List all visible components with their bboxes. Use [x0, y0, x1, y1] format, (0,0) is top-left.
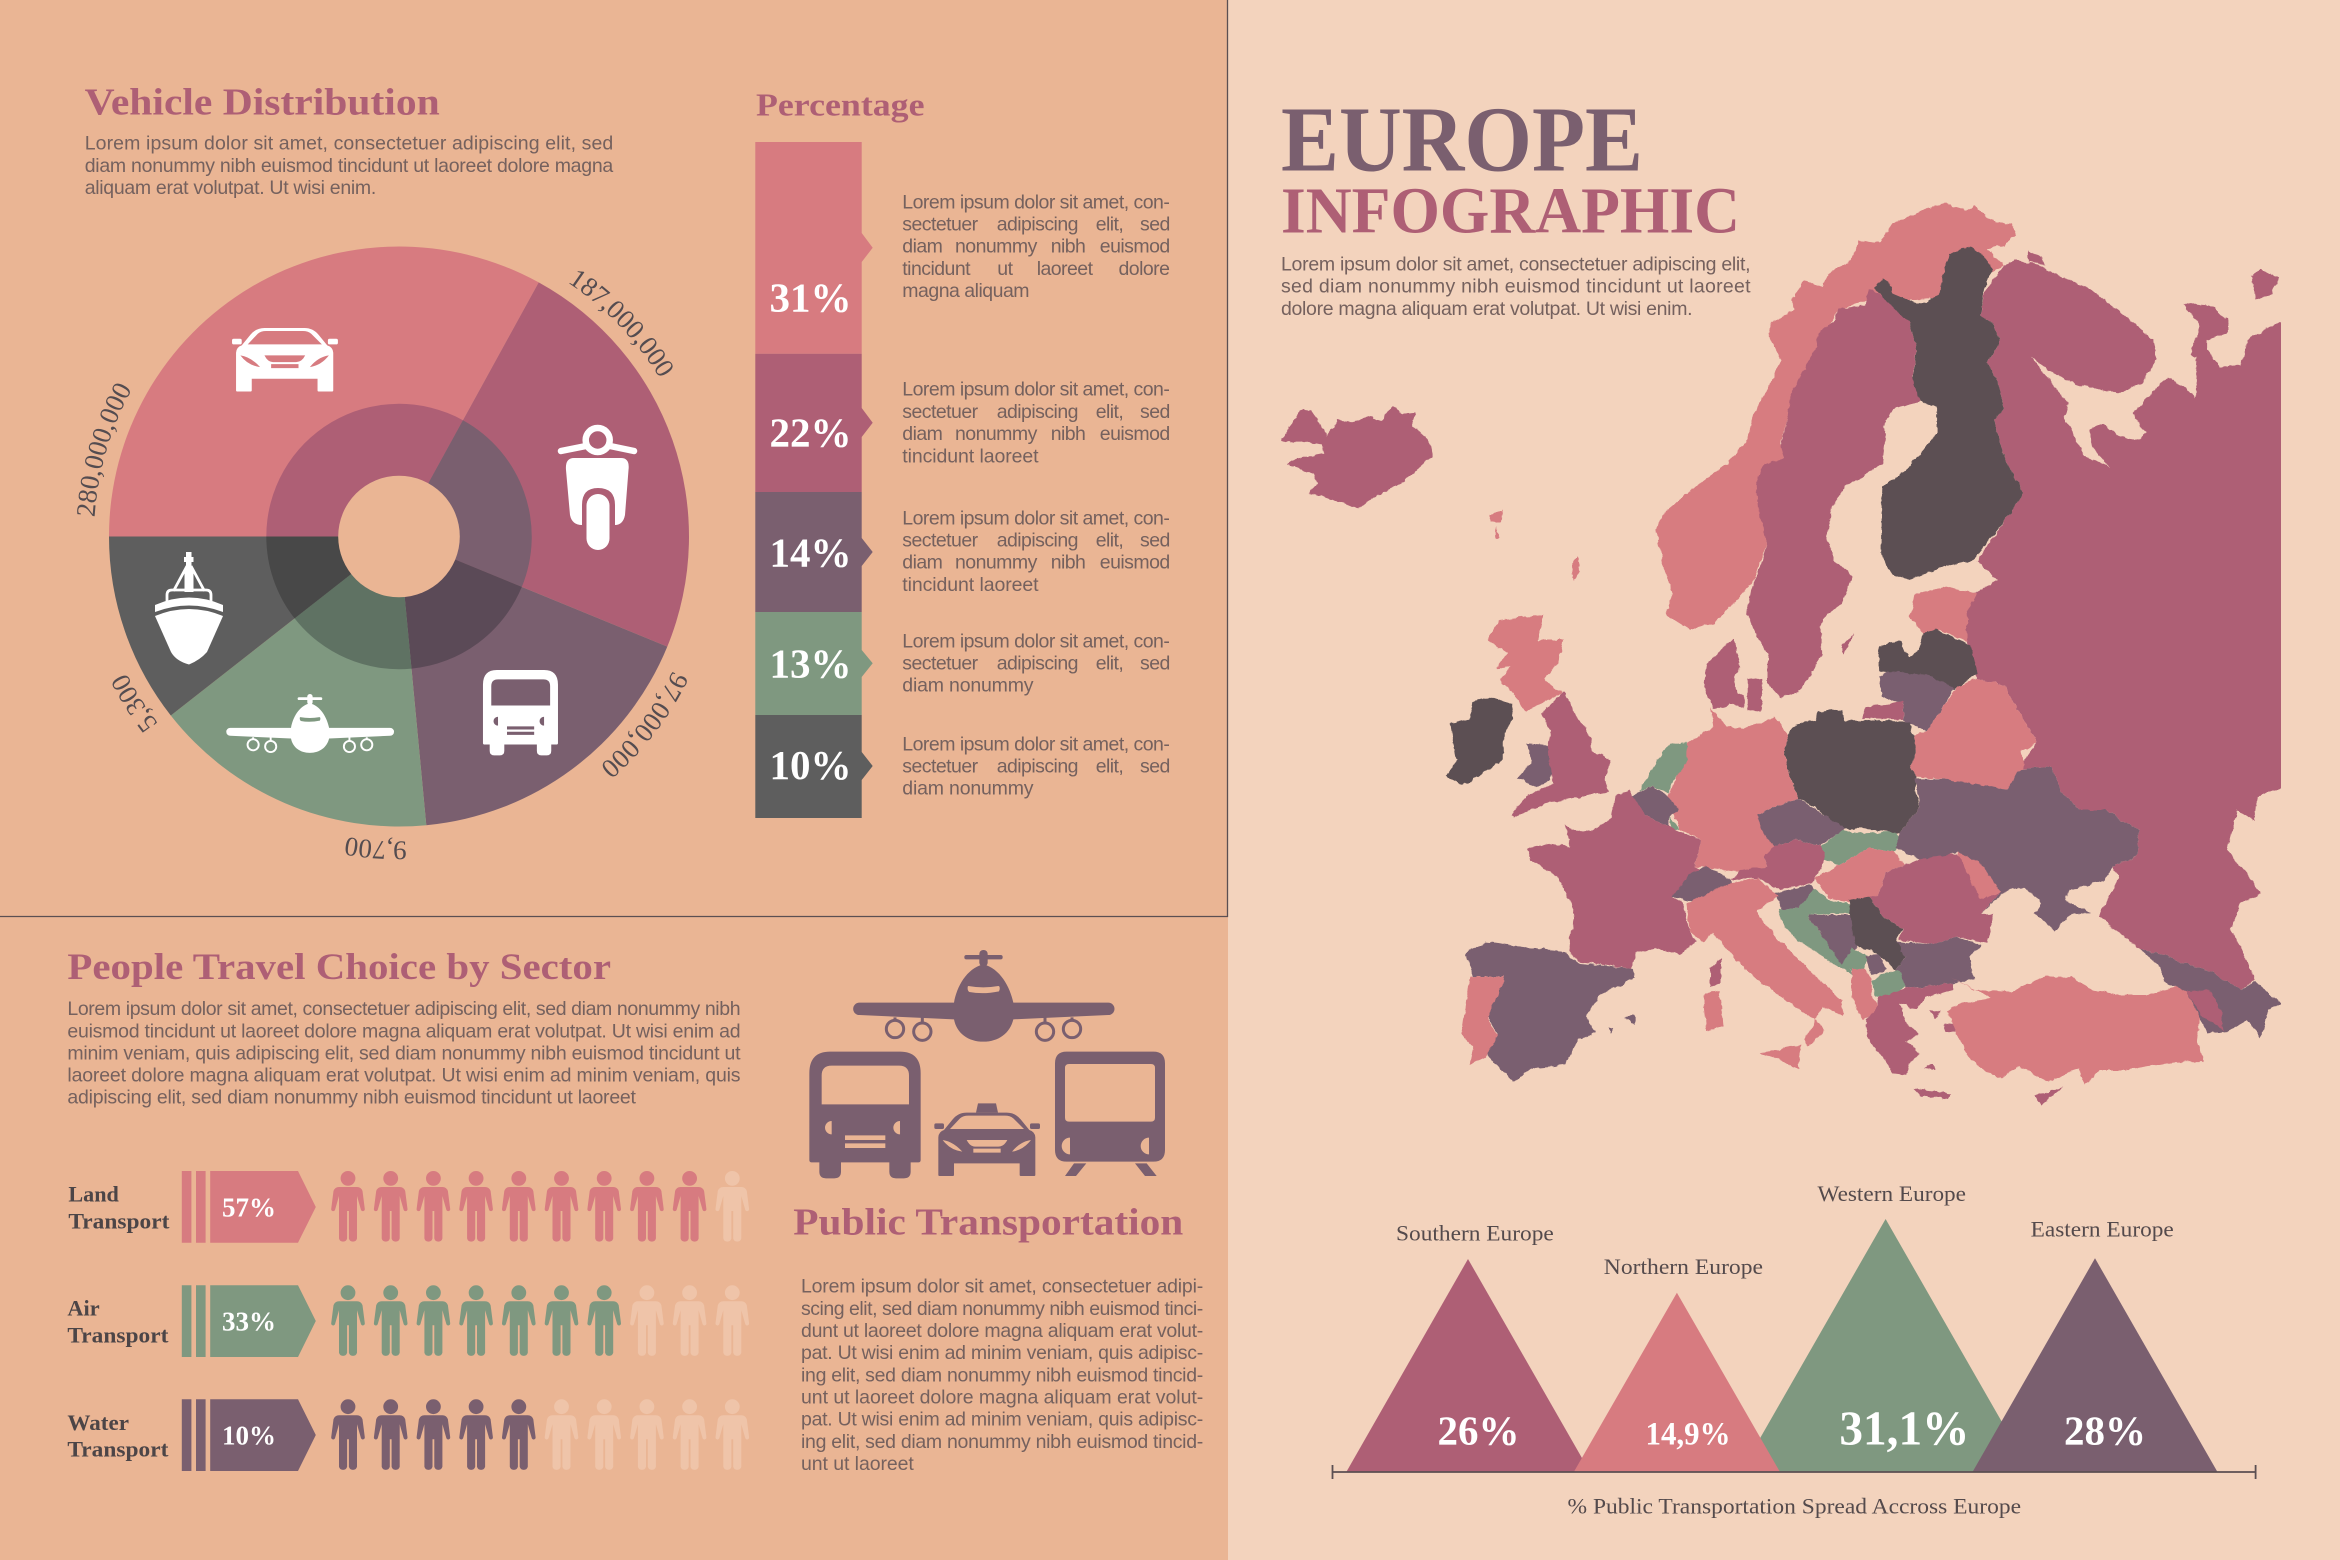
bar: 14%: [755, 492, 873, 612]
text block: public transportation body: dunt ut laoreet dolore magna aliquam erat volut-: [801, 1320, 1203, 1342]
panel: people travel choice: [67, 947, 749, 1471]
labels: vehicle counts: 187,000,000: [569, 271, 673, 376]
row: water transport: Water: [67, 1410, 129, 1435]
country: Finland: [1874, 247, 2023, 580]
text block: 31% description: sed: [1140, 214, 1170, 236]
country: Netherlands: [1639, 742, 1686, 793]
icon: scooter: [561, 428, 634, 550]
text block: 31% description: dolore: [1118, 258, 1169, 280]
island: Novaya Zemlya: [2251, 269, 2278, 300]
row: air transport: Air: [67, 1296, 100, 1321]
value: 14,9%: 14,9%: [1646, 1416, 1730, 1452]
text block: people travel intro: Lorem ipsum dolor sit amet, consectetuer adipiscing elit, sed diam nonummy nibh: [67, 998, 740, 1020]
label: Western Europe: Western Europe: [1818, 1181, 1966, 1206]
icon: taxi: [934, 1103, 1040, 1176]
country: Estonia: [1910, 587, 1977, 643]
country: England: [1511, 692, 1611, 817]
label: Northern Europe: Northern Europe: [1604, 1254, 1763, 1279]
text block: 22% description: elit,: [1096, 401, 1123, 423]
bar: 31%: 31%: [770, 275, 852, 321]
text block: public transportation body: pat. Ut wisi enim ad minim veniam, quis adipisc-: [801, 1409, 1203, 1431]
text block: 31% description: [902, 191, 1170, 302]
labels: vehicle counts: 5,300: [112, 676, 157, 733]
country: Spain: [1465, 942, 1636, 1082]
triangle: Eastern Europe: [1972, 1258, 2218, 1472]
text block: 31% description: diam: [902, 236, 942, 258]
text block: public transportation body: unt ut laoreet: [801, 1453, 914, 1475]
country: Italy: [1686, 878, 1842, 1070]
value: 28%: 28%: [2064, 1407, 2146, 1453]
text block: 10% description: elit,: [1096, 756, 1123, 778]
donut hole: [338, 476, 460, 597]
text block: 22% description: euismod: [1100, 423, 1170, 445]
title block: [1281, 89, 1751, 320]
caption: % Public Transportation Spread Accross Europe: [1568, 1493, 2021, 1518]
text block: 13% description: sed: [1140, 652, 1170, 674]
map: southern region: [1446, 615, 2288, 1105]
icon: plane: [226, 694, 394, 753]
text block: 14% description: adipiscing: [997, 530, 1078, 552]
bar: 13%: [755, 612, 873, 715]
text block: 14% description: Lorem ipsum dolor sit amet, con-: [902, 507, 1169, 529]
label: Southern Europe: Southern Europe: [1396, 1221, 1554, 1246]
text block: 31% description: adipiscing: [997, 214, 1078, 236]
heading: people travel choice: People Travel Choice by Sector: [67, 947, 611, 988]
text block: 22% description: nibh: [1051, 423, 1085, 445]
text block: people travel intro: euismod tincidunt ut laoreet dolore magna aliquam erat volutpat. Ut wisi enim ad: [67, 1020, 740, 1042]
text block: title intro: Lorem ipsum dolor sit amet, consectetuer adipiscing elit,: [1281, 254, 1750, 276]
triangle: Southern Europe: [1346, 1259, 1590, 1472]
slice: car: [109, 247, 539, 536]
country: Montenegro: [1866, 955, 1886, 975]
text block: public transportation body: [801, 1276, 1203, 1475]
country: Czechia: [1757, 798, 1845, 847]
country: Kosovo green: [1843, 948, 1869, 977]
text block: 22% description: [902, 379, 1170, 467]
bar: 13%: 13%: [770, 641, 852, 687]
text block: 13% description: adipiscing: [997, 652, 1078, 674]
country: Portugal: [1462, 977, 1505, 1065]
country: Armenia: [2187, 990, 2224, 1030]
heading: vehicle distribution: Vehicle Distribution: [85, 82, 440, 124]
slice: motorbike: [399, 282, 689, 647]
text block: 13% description: sectetuer: [902, 652, 979, 674]
text block: vehicle intro: aliquam erat volutpat. Ut wisi enim.: [85, 177, 376, 199]
map: Europe: [1281, 203, 2288, 1105]
icon: bus: [483, 670, 558, 755]
text block: 13% description: elit,: [1096, 652, 1123, 674]
country: Sweden: [1747, 288, 1920, 698]
country: Serbia: [1849, 897, 1906, 970]
country: Hungary: [1815, 848, 1904, 903]
row: land transport: 57%: [222, 1193, 276, 1223]
country: Wales: [1517, 743, 1551, 787]
chart: vehicle donut: [77, 246, 689, 860]
country: Belarus: [1910, 678, 2037, 790]
icon: car: [232, 328, 338, 391]
labels: vehicle counts: 97,000,000: [602, 672, 687, 776]
bar: 10%: [755, 715, 873, 818]
text block: 22% description: sed: [1140, 401, 1170, 423]
triangle: Western Europe: [1741, 1219, 2031, 1472]
text block: 31% description: ut: [997, 258, 1014, 280]
row: air transport: 33%: [222, 1307, 276, 1337]
labels: vehicle counts: 280,000,000: [77, 384, 130, 516]
bar: 14%: 14%: [770, 530, 852, 576]
text block: 31% description: nonummy: [955, 236, 1038, 258]
text block: 10% description: diam nonummy: [902, 778, 1034, 800]
text block: 14% description: nonummy: [955, 552, 1038, 574]
text block: 14% description: diam: [902, 552, 942, 574]
text block: 14% description: sectetuer: [902, 530, 979, 552]
labels: vehicle counts: [77, 271, 687, 860]
country: Austria: [1730, 840, 1825, 890]
country: Luxembourg: [1669, 817, 1680, 830]
value: 31,1%: 31,1%: [1839, 1400, 1969, 1455]
country: Croatia: [1778, 888, 1855, 977]
label: Eastern Europe: Eastern Europe: [2031, 1217, 2174, 1242]
text block: 10% description: sectetuer: [902, 756, 979, 778]
country: Scotland: [1487, 615, 1563, 712]
text block: 31% description: euismod: [1100, 236, 1170, 258]
text block: 31% description: laoreet: [1037, 258, 1094, 280]
country: Slovakia: [1822, 830, 1899, 865]
row: land transport: Land: [68, 1182, 119, 1207]
labels: vehicle counts: 9,700: [346, 837, 406, 860]
country: Albania: [1852, 967, 1879, 1022]
country: Cyprus: [2035, 1087, 2064, 1105]
country: Slovenia: [1774, 885, 1815, 910]
text block: public transportation body: scing elit, sed diam nonummy nibh euismod tinci-: [801, 1298, 1203, 1320]
country: Bulgaria: [1896, 937, 1981, 988]
country: North Macedonia: [1872, 970, 1906, 997]
text block: 22% description: tincidunt laoreet: [902, 445, 1039, 467]
text block: 22% description: adipiscing: [997, 401, 1078, 423]
country: Faroe and Shetland islands: [1489, 510, 1580, 582]
text block: public transportation body: ing elit, sed diam nonummy nibh euismod tincid-: [801, 1431, 1203, 1453]
slice: ship: [109, 536, 399, 716]
country: Ireland: [1446, 697, 1514, 785]
country: Belgium: [1625, 787, 1678, 827]
row: land transport: [68, 1171, 749, 1243]
slice: plane: [171, 536, 426, 826]
text block: public transportation body: Lorem ipsum dolor sit amet, consectetuer adipi-: [801, 1276, 1203, 1298]
axis: [1332, 1465, 2256, 1479]
text block: people travel intro: minim veniam, quis adipiscing elit, sed diam nonummy nibh euismod tincidunt ut: [67, 1042, 741, 1064]
text block: public transportation body: ing elit, sed diam nonummy nibh euismod tincid-: [801, 1364, 1203, 1386]
country: Russia south: [1967, 620, 2288, 990]
text block: 31% description: tincidunt: [902, 258, 971, 280]
text block: 10% description: sed: [1140, 756, 1170, 778]
text block: 31% description: elit,: [1096, 214, 1123, 236]
text block: 22% description: sectetuer: [902, 401, 979, 423]
triangle: Northern Europe: [1574, 1293, 1780, 1472]
text block: 22% description: nonummy: [955, 423, 1038, 445]
row: air transport: Transport: [67, 1322, 169, 1347]
country: Poland: [1784, 710, 1920, 833]
country: Bosnia: [1808, 915, 1857, 965]
heading: percentage: Percentage: [756, 87, 924, 123]
text block: 10% description: [902, 733, 1170, 800]
row: water transport: [67, 1399, 749, 1471]
text block: 13% description: [902, 630, 1170, 697]
country: Latvia: [1879, 630, 1977, 690]
text block: 10% description: Lorem ipsum dolor sit amet, con-: [902, 733, 1169, 755]
text block: 14% description: sed: [1140, 530, 1170, 552]
text block: 14% description: nibh: [1051, 552, 1085, 574]
text block: public transportation body: unt ut laoreet dolore magna aliquam erat volut-: [801, 1386, 1203, 1408]
region: Kaliningrad: [1862, 702, 1903, 720]
row: air transport: [67, 1285, 749, 1357]
country: Iceland: [1281, 407, 1433, 508]
country: Greece: [1866, 983, 1956, 1099]
panel: vehicle distribution: [77, 82, 689, 860]
text block: people travel intro: [67, 998, 741, 1108]
icon: bus: [809, 1052, 921, 1178]
title: INFOGRAPHIC: INFOGRAPHIC: [1281, 175, 1740, 248]
text block: 31% description: sectetuer: [902, 214, 979, 236]
text block: 31% description: nibh: [1051, 236, 1085, 258]
text block: people travel intro: adipiscing elit, sed diam nonummy nibh euismod tincidunt ut laoreet: [67, 1086, 637, 1108]
text block: title intro: dolore magna aliquam erat volutpat. Ut wisi enim.: [1281, 298, 1692, 320]
slice: bus: [399, 536, 667, 825]
country: Romania: [1869, 853, 2001, 945]
text block: 10% description: adipiscing: [997, 756, 1078, 778]
text block: vehicle intro: [85, 132, 613, 199]
text block: vehicle intro: diam nonummy nibh euismod tincidunt ut laoreet dolore magna: [85, 155, 613, 177]
text block: 13% description: Lorem ipsum dolor sit amet, con-: [902, 630, 1169, 652]
row: water transport: 10%: [222, 1421, 276, 1451]
country: Moldova: [1957, 852, 2001, 900]
inner ring: [266, 404, 532, 669]
panel: public transportation: [793, 950, 1203, 1475]
panel: left background: [0, 0, 1228, 1560]
value: 26%: 26%: [1438, 1407, 1520, 1453]
bar: 22%: [755, 354, 873, 492]
text block: 31% description: Lorem ipsum dolor sit amet, con-: [902, 191, 1169, 213]
heading: public transportation: Public Transportation: [793, 1201, 1183, 1243]
country: Norway: [1656, 203, 2016, 630]
row: land transport: Transport: [68, 1208, 170, 1233]
text block: title intro: sed diam nonummy nibh euismod tincidunt ut laoreet: [1281, 276, 1751, 298]
map: northern region: [1281, 203, 2288, 698]
country: Germany: [1667, 708, 1798, 872]
text block: 14% description: tincidunt laoreet: [902, 574, 1039, 596]
island: Kolguev area: [2028, 250, 2045, 265]
chart: public transport spread: [1332, 1181, 2256, 1518]
text block: public transportation body: pat. Ut wisi enim ad minim veniam, quis adipisc-: [801, 1342, 1203, 1364]
country: France: [1527, 790, 1701, 968]
icon: plane: [853, 950, 1114, 1042]
text block: 31% description: magna aliquam: [902, 280, 1029, 302]
text block: 22% description: diam: [902, 423, 942, 445]
region: Caucasus: [2139, 948, 2282, 1038]
bar: 22%: 22%: [770, 410, 852, 456]
icons: transport group: [809, 950, 1165, 1178]
row: water transport: Transport: [67, 1437, 169, 1462]
text block: 14% description: euismod: [1100, 552, 1170, 574]
island: Corsica: [1710, 957, 1722, 987]
country: Lithuania: [1879, 672, 1953, 732]
country: Ukraine: [1895, 767, 2139, 932]
icon: ship: [155, 552, 223, 664]
text block: vehicle intro: Lorem ipsum dolor sit amet, consectetuer adipiscing elit, sed: [85, 132, 613, 154]
text block: 14% description: [902, 507, 1170, 596]
country: Gotland: [1842, 633, 1854, 655]
text block: 13% description: diam nonummy: [902, 675, 1034, 697]
text block: 22% description: Lorem ipsum dolor sit amet, con-: [902, 379, 1169, 401]
text block: people travel intro: laoreet dolore magna aliquam erat volutpat. Ut wisi enim ad minim veniam, quis: [67, 1065, 741, 1087]
country: Turkey: [1947, 977, 2204, 1085]
country: Switzerland: [1673, 867, 1734, 903]
country: Russia north: [1967, 260, 2288, 633]
icon: train: [1055, 1052, 1165, 1176]
text block: title intro: [1281, 254, 1751, 320]
text block: 14% description: elit,: [1096, 530, 1123, 552]
bar: 10%: 10%: [770, 742, 852, 788]
panel: percentage: [755, 87, 1170, 818]
title: EUROPE: EUROPE: [1281, 89, 1643, 192]
bar: 31%: [755, 142, 873, 354]
country: Denmark: [1703, 638, 1762, 712]
